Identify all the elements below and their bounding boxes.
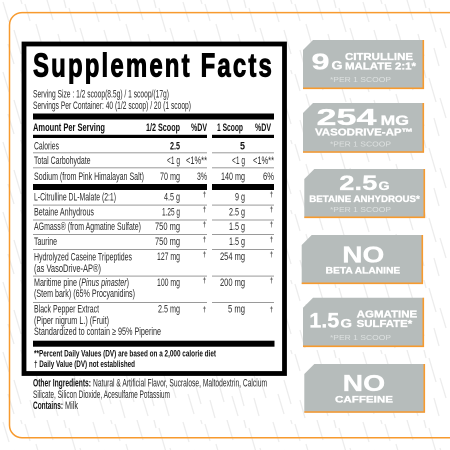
row: l-citrulline: L-Citrulline DL-Malate (2:1) <box>34 192 116 204</box>
row: maritime pine <box>33 277 274 303</box>
row: l-citrulline: † <box>202 192 206 199</box>
row: sodium: 3% <box>197 171 207 183</box>
badge: 254mg vasodrive: *PER 1 SCOOP <box>330 142 391 149</box>
row: l-citrulline <box>33 192 274 206</box>
row: agmass: AGmass® (from Agmatine Sulfate) <box>34 221 141 233</box>
badge: 1.5g agmatine sulfate: 1.5 <box>309 309 340 332</box>
row: black pepper extract: Standardized to contain ≥ 95% Piperine <box>34 326 161 338</box>
row: l-citrulline: 9 g <box>235 192 245 204</box>
row: agmass: † <box>270 222 274 229</box>
badge: 9g citrulline malate: G <box>332 58 342 72</box>
footnotes <box>34 349 217 370</box>
badge: 1.5g agmatine sulfate <box>303 298 424 347</box>
row: hydrolyzed caseine tripeptides: 127 mg <box>157 251 180 263</box>
badge: 1.5g agmatine sulfate: SULFATE* <box>357 319 412 330</box>
badge: 2.5g betaine anhydrous: G <box>378 179 390 193</box>
table header: 1/2 Scoop <box>146 122 180 134</box>
row: agmass: 1.5 g <box>229 221 245 233</box>
row: black pepper extract <box>34 304 274 338</box>
row: hydrolyzed caseine tripeptides: (as VasoDrive-AP®) <box>34 263 101 275</box>
badge: 254mg vasodrive <box>303 103 424 153</box>
row: calories: 5 <box>240 140 245 152</box>
row: total carbohydrate: <1%** <box>186 155 207 167</box>
row: l-citrulline: 4.5 g <box>164 192 180 204</box>
row: black pepper extract: 5 mg <box>228 304 245 316</box>
row: hydrolyzed caseine tripeptides: Hydrolyzed Caseine Tripeptides <box>34 252 132 264</box>
table header: %DV <box>191 122 207 134</box>
badge: no beta alanine: BETA ALANINE <box>326 266 400 277</box>
row: hydrolyzed caseine tripeptides: † <box>270 252 274 259</box>
footnotes: † Daily Value (DV) not established <box>34 359 135 370</box>
row: agmass <box>33 221 274 235</box>
row: taurine: 1.5 g <box>229 236 245 248</box>
other ingredients: Milk <box>65 400 78 412</box>
badge: 1.5g agmatine sulfate: *PER 1 SCOOP <box>330 335 391 342</box>
table header: 1 Scoop <box>217 122 243 134</box>
row: taurine: Taurine <box>34 236 57 248</box>
row: betaine <box>33 206 274 220</box>
row: calories <box>33 140 274 153</box>
row: sodium: 6% <box>263 171 274 183</box>
row: maritime pine: 200 mg <box>220 277 245 289</box>
row: hydrolyzed caseine tripeptides <box>33 251 274 277</box>
row: calories: 2.5 <box>170 140 180 152</box>
badge: 2.5g betaine anhydrous: 2.5 <box>339 172 378 195</box>
badge: 2.5g betaine anhydrous: *PER 1 SCOOP <box>330 207 391 214</box>
row: hydrolyzed caseine tripeptides: † <box>202 252 206 259</box>
row: maritime pine: 100 mg <box>157 277 180 289</box>
row: sodium <box>33 171 274 190</box>
badge: 2.5g betaine anhydrous <box>304 169 425 218</box>
row: sodium: 70 mg <box>160 171 180 183</box>
row: black pepper extract: Black Pepper Extract <box>34 304 99 316</box>
badge: 254mg vasodrive: 254 <box>316 104 377 130</box>
badge: 9g citrulline malate <box>303 40 424 89</box>
row: sodium: Sodium (from Pink Himalayan Salt) <box>34 171 144 183</box>
row: betaine: Betaine Anhydrous <box>34 206 94 218</box>
badge: 254mg vasodrive: VASODRIVE-AP™ <box>315 128 413 139</box>
badge: 254mg vasodrive: MG <box>380 112 409 128</box>
row: total carbohydrate: <1%** <box>253 155 274 167</box>
badge: 9g citrulline malate: 9 <box>312 48 330 74</box>
row: taurine: † <box>202 237 206 244</box>
table header: %DV <box>255 122 271 134</box>
other ingredients: Contains: <box>33 400 63 412</box>
row: black pepper extract: (Piper nigrum L.) (Fruit) <box>34 315 109 327</box>
row: black pepper extract: † <box>270 307 274 314</box>
row: total carbohydrate: <1 g <box>167 155 180 167</box>
row: black pepper extract: † <box>202 307 206 314</box>
badge: no caffeine: CAFFEINE <box>335 394 393 405</box>
other ingredients: Natural & Artificial Flavor, Sucralose, Maltodextrin, Calcium <box>93 378 267 390</box>
title: Supplement Facts <box>33 46 274 84</box>
row: betaine: 1.25 g <box>162 206 180 218</box>
other ingredients: Silicate, Silicon Dioxide, Acesulfame Potassium <box>33 389 170 401</box>
badge: 9g citrulline malate: *PER 1 SCOOP <box>330 77 391 84</box>
footnotes: **Percent Daily Values (DV) are based on a 2,000 calorie diet <box>34 349 217 360</box>
row: total carbohydrate <box>33 155 274 168</box>
row: sodium: 140 mg <box>221 171 245 183</box>
row: betaine: 2.5 g <box>229 206 245 218</box>
table header <box>33 114 274 138</box>
row: agmass: † <box>202 222 206 229</box>
row: maritime pine: (Stem bark) (65% Procyanidins) <box>34 288 135 300</box>
row: taurine: † <box>270 237 274 244</box>
serving info: Servings Per Container: 40 (1/2 scoop) / 20 (1 scoop) <box>33 100 191 112</box>
row: agmass: 750 mg <box>155 221 180 233</box>
other ingredients: Other Ingredients: <box>33 378 91 390</box>
badge: 1.5g agmatine sulfate: AGMATINE <box>357 309 418 320</box>
row: hydrolyzed caseine tripeptides: 254 mg <box>220 251 245 263</box>
badge: 2.5g betaine anhydrous: BETAINE ANHYDROUS* <box>309 194 420 205</box>
row: taurine: 750 mg <box>155 236 180 248</box>
badge: 9g citrulline malate: CITRULLINE <box>345 52 413 63</box>
supplement facts panel <box>24 44 284 374</box>
row: betaine: † <box>202 207 206 214</box>
serving info <box>33 88 191 112</box>
closing bar <box>33 341 274 347</box>
row: black pepper extract: 2.5 mg <box>158 304 180 316</box>
badge: no beta alanine: NO <box>342 241 384 267</box>
row: total carbohydrate: <1 g <box>232 155 245 167</box>
badge: 9g citrulline malate: MALATE 2:1* <box>345 61 416 72</box>
serving info: Serving Size : 1/2 scoop(8.5g) / 1 scoop/(17g) <box>33 88 169 100</box>
row: calories: Calories <box>34 140 59 152</box>
row: maritime pine: Maritime pine (Pinus pinaster) <box>34 277 129 289</box>
table header: Amount Per Serving <box>33 122 105 134</box>
row: betaine: † <box>270 207 274 214</box>
row: l-citrulline: † <box>270 192 274 199</box>
row: taurine <box>33 236 274 250</box>
badge: no caffeine <box>304 364 425 413</box>
badge: no beta alanine <box>302 235 423 284</box>
row: maritime pine: † <box>270 278 274 285</box>
row: maritime pine: † <box>202 278 206 285</box>
badge: no caffeine: NO <box>343 370 385 396</box>
row: total carbohydrate: Total Carbohydate <box>34 155 91 167</box>
badge: 1.5g agmatine sulfate: G <box>340 316 352 330</box>
other ingredients <box>33 378 267 412</box>
